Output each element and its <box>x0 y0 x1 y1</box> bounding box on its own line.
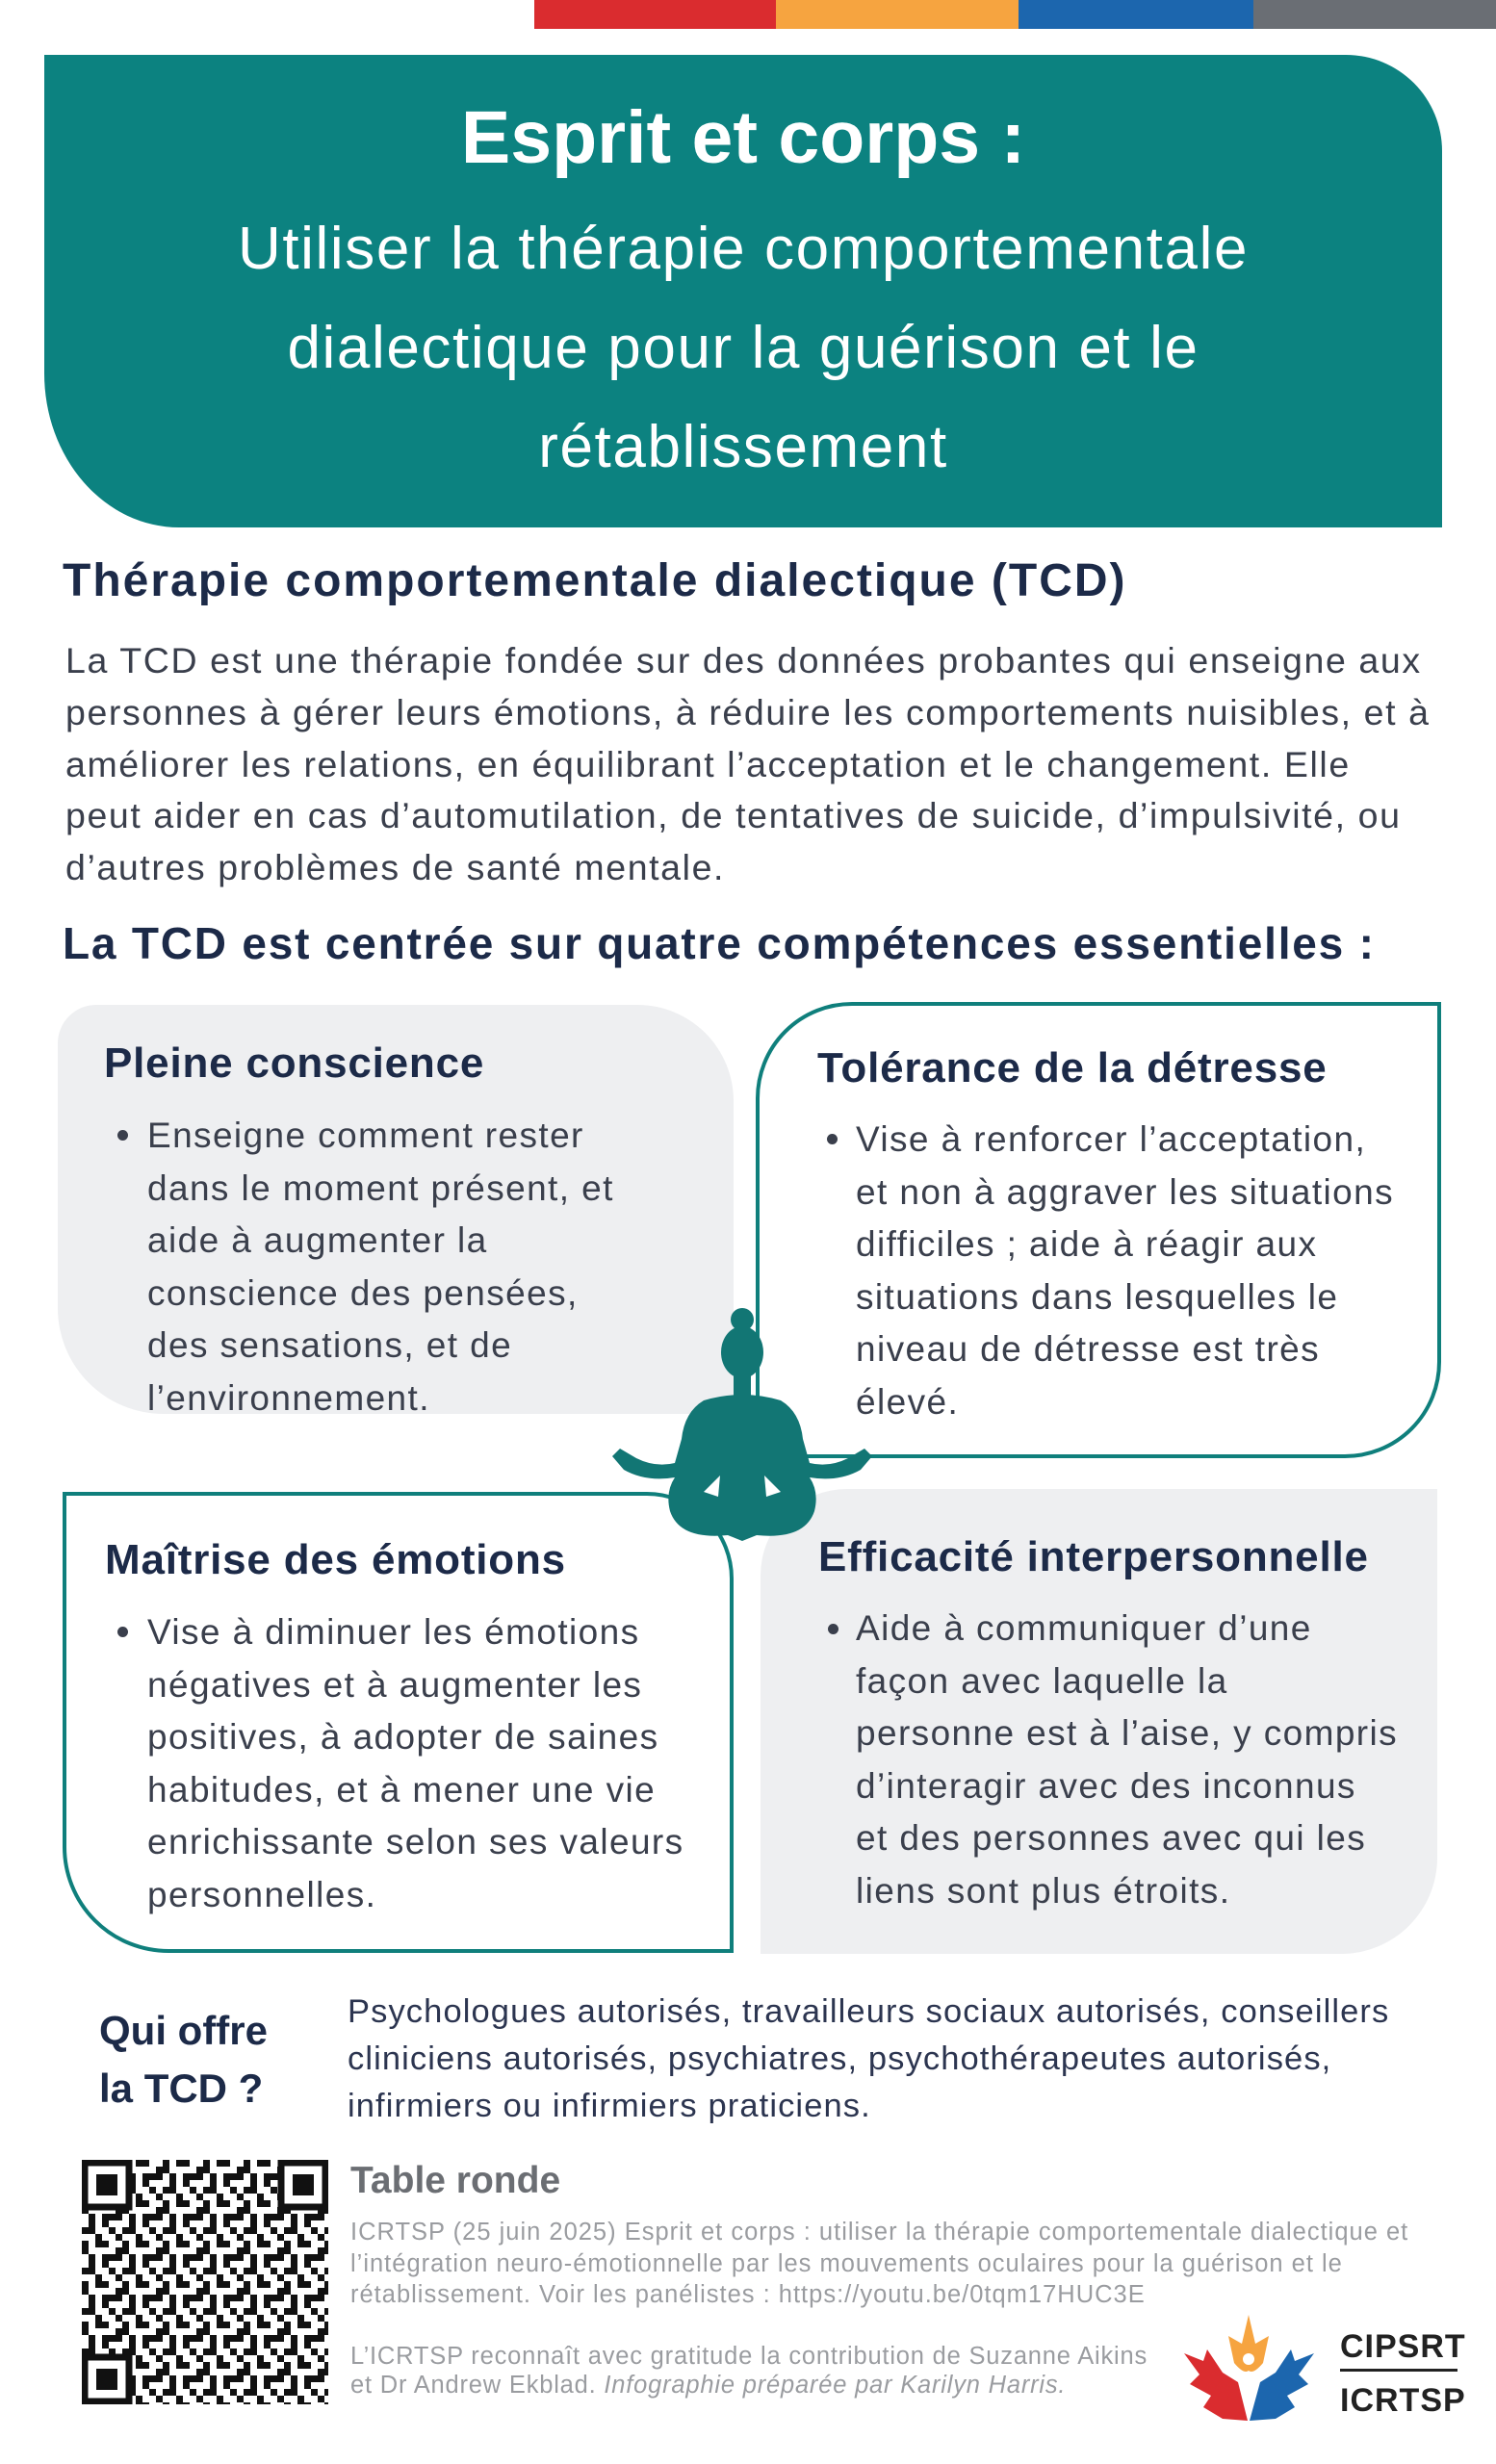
panel: efficacité interpersonnelle: liens sont plus étroits. <box>856 1871 1230 1910</box>
panel: tolérance de la détresse: niveau de détresse est très <box>856 1329 1320 1369</box>
header banner <box>44 55 1442 527</box>
providers text: Psychologues autorisés, travailleurs sociaux autorisés, conseillers <box>348 1993 1389 2030</box>
acknowledgement: et Dr Andrew Ekblad. Infographie préparée par Karilyn Harris. <box>350 2372 1066 2399</box>
panel: pleine conscience: l’environnement. <box>147 1378 430 1417</box>
panel: pleine conscience: Enseigne comment rester <box>147 1116 584 1155</box>
panel: tolérance de la détresse: et non à aggraver les situations <box>856 1172 1394 1211</box>
providers text: cliniciens autorisés, psychiatres, psychothérapeutes autorisés, <box>348 2040 1331 2077</box>
panel: maîtrise des émotions: Vise à diminuer les émotions <box>147 1612 640 1652</box>
panel: efficacité interpersonnelle <box>761 1489 1437 1954</box>
question: qui offre: la TCD ? <box>99 2066 263 2111</box>
acknowledgement <box>350 2343 1148 2399</box>
icon: meditating figure <box>612 1308 872 1541</box>
heading: TCD: Thérapie comportementale dialectique (TCD) <box>63 555 1127 606</box>
heading: table ronde: Table ronde <box>350 2160 560 2201</box>
panel: maîtrise des émotions: Maîtrise des émotions <box>105 1536 566 1583</box>
panel: pleine conscience <box>58 1005 734 1414</box>
question: qui offre <box>99 2008 268 2111</box>
panel: tolérance de la détresse: difficiles ; aide à réagir aux <box>856 1224 1317 1264</box>
title: Esprit et corps : <box>461 96 1025 179</box>
panel: tolérance de la détresse: situations dans lesquelles le <box>856 1276 1338 1317</box>
panel: efficacité interpersonnelle: Aide à communiquer d’une <box>856 1608 1312 1648</box>
panel: pleine conscience: conscience des pensées, <box>147 1272 579 1313</box>
subtitle: Utiliser la thérapie comportementale <box>238 216 1249 282</box>
panel: efficacité interpersonnelle: Efficacité interpersonnelle <box>818 1533 1369 1580</box>
providers text: infirmiers ou infirmiers praticiens. <box>348 2088 871 2124</box>
subtitle: rétablissement <box>538 414 948 480</box>
logo: CIPSRT ICRTSP <box>1184 2315 1466 2421</box>
panel: maîtrise des émotions: enrichissante selon ses valeurs <box>147 1822 684 1861</box>
intro paragraph: La TCD est une thérapie fondée sur des données probantes qui enseigne aux <box>65 640 1422 680</box>
panel: maîtrise des émotions: personnelles. <box>147 1875 376 1913</box>
panel: tolérance de la détresse: Tolérance de la détresse <box>817 1044 1328 1091</box>
color bars <box>534 0 1496 29</box>
citation text <box>350 2219 1408 2308</box>
providers text <box>348 1993 1389 2124</box>
panel: efficacité interpersonnelle: personne est à l’aise, y compris <box>856 1713 1398 1753</box>
citation text: rétablissement. Voir les panélistes : https://youtu.be/0tqm17HUC3E <box>350 2281 1146 2308</box>
panel: maîtrise des émotions: négatives et à augmenter les <box>147 1665 642 1704</box>
panel: tolérance de la détresse: élevé. <box>856 1382 959 1421</box>
logo: CIPSRT ICRTSP: CIPSRT <box>1340 2328 1466 2365</box>
panel: maîtrise des émotions: habitudes, et à mener une vie <box>147 1769 656 1810</box>
panel: pleine conscience: dans le moment présent, et <box>147 1168 614 1207</box>
intro paragraph: améliorer les relations, en équilibrant l’acceptation et le changement. Elle <box>65 744 1351 784</box>
subtitle <box>238 216 1249 480</box>
heading: four skills: La TCD est centrée sur quatre compétences essentielles : <box>63 918 1376 968</box>
question: qui offre: Qui offre <box>99 2008 268 2053</box>
panel: efficacité interpersonnelle: et des personnes avec qui les <box>856 1818 1366 1858</box>
intro paragraph: personnes à gérer leurs émotions, à réduire les comportements nuisibles, et à <box>65 692 1431 732</box>
citation text: ICRTSP (25 juin 2025) Esprit et corps : utiliser la thérapie comportementale dialectique et <box>350 2219 1408 2246</box>
panel: maîtrise des émotions <box>63 1492 734 1953</box>
intro paragraph <box>65 640 1431 887</box>
intro paragraph: peut aider en cas d’automutilation, de tentatives de suicide, d’impulsivité, ou <box>65 795 1402 835</box>
panel: efficacité interpersonnelle: d’interagir avec des inconnus <box>856 1765 1356 1806</box>
logo: CIPSRT ICRTSP: ICRTSP <box>1340 2382 1466 2419</box>
panel: efficacité interpersonnelle: façon avec laquelle la <box>856 1661 1228 1700</box>
panel: pleine conscience: aide à augmenter la <box>147 1220 488 1260</box>
panel: pleine conscience: des sensations, et de <box>147 1325 512 1365</box>
intro paragraph: d’autres problèmes de santé mentale. <box>65 847 725 887</box>
panel: maîtrise des émotions: positives, à adopter de saines <box>147 1717 659 1757</box>
citation text: l’intégration neuro-émotionnelle par les mouvements oculaires pour la guérison et le <box>350 2250 1343 2277</box>
acknowledgement: L’ICRTSP reconnaît avec gratitude la contribution de Suzanne Aikins <box>350 2343 1148 2370</box>
QR code <box>82 2160 328 2404</box>
panel: tolérance de la détresse: Vise à renforcer l’acceptation, <box>856 1119 1366 1159</box>
panel: tolérance de la détresse <box>756 1002 1441 1458</box>
subtitle: dialectique pour la guérison et le <box>287 315 1199 381</box>
panel: pleine conscience: Pleine conscience <box>104 1040 484 1087</box>
